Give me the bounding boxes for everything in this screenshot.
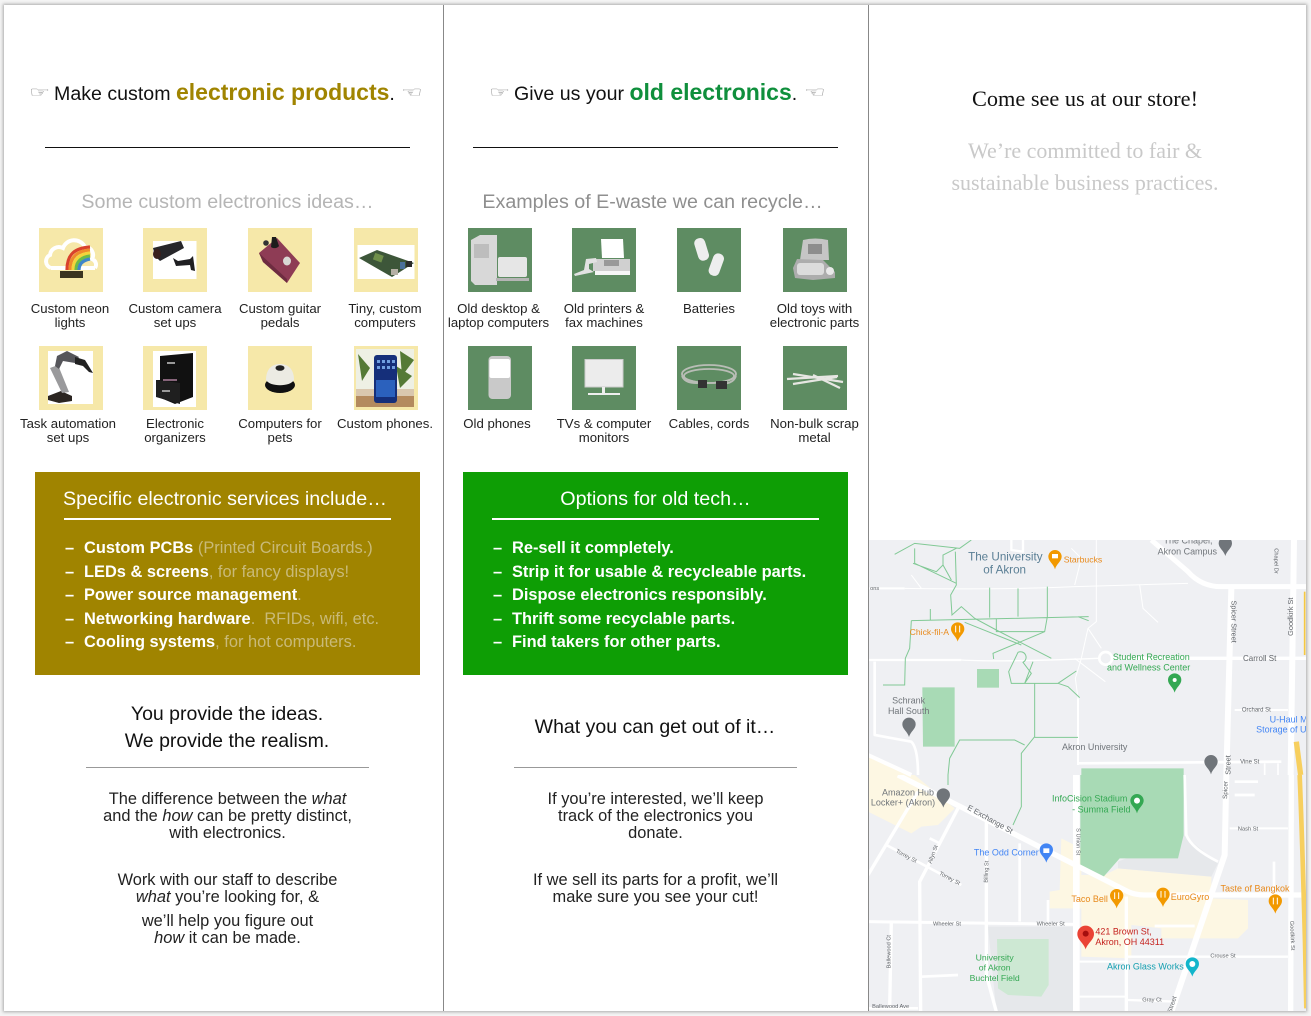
label: tiny custom computers: Tiny, custom xyxy=(348,301,422,316)
label: custom neon lights xyxy=(31,301,109,330)
label: old desktop and laptop computers: Old desktop & xyxy=(457,301,540,316)
text: keep track of the electronics xyxy=(548,790,763,842)
label: custom phones: Custom phones. xyxy=(337,416,433,431)
label: old desktop and laptop computers xyxy=(448,301,549,330)
text: keep track of the electronics: If you’re interested, we’ll keep xyxy=(548,790,763,808)
icon: scrap metal xyxy=(783,346,847,410)
label: old toys with electronic parts xyxy=(770,301,859,330)
label: tiny custom computers xyxy=(348,301,422,330)
text: share of profit xyxy=(533,871,778,906)
options list: Strip it for usable & recycleable parts. xyxy=(512,562,806,580)
label: custom guitar pedals: Custom guitar xyxy=(239,301,321,316)
service list: – xyxy=(65,562,74,580)
icon: batteries xyxy=(677,228,741,292)
label: custom camera set ups: Custom camera xyxy=(128,301,222,316)
heading: give us your old electronics: ☞ xyxy=(489,83,511,100)
options list: – xyxy=(493,610,502,628)
map: store location: Amazon Hub xyxy=(882,788,934,798)
pin: schrank hall xyxy=(902,718,916,737)
map: store location: Vine St xyxy=(1240,760,1260,766)
map: store location: Akron University xyxy=(1062,742,1128,752)
service list: Networking hardware. RFIDs, wifi, etc. xyxy=(84,610,379,628)
label: custom camera set ups: set ups xyxy=(154,315,196,330)
pin: infocision stadium: - Summa Field xyxy=(1072,805,1131,815)
label: old printers and fax machines xyxy=(564,301,644,330)
pin: taste of bangkok xyxy=(1221,883,1290,914)
text: work with our staff xyxy=(118,871,337,947)
pin: student recreation: Student Recreation xyxy=(1113,652,1190,662)
map: store location: ons xyxy=(870,586,879,592)
text: work with our staff: we’ll help you figure out xyxy=(142,912,313,930)
label: electronic organizers: organizers xyxy=(144,430,206,445)
pin: eurogyro: EuroGyro xyxy=(1171,892,1209,902)
map: store location: Chapel Dr xyxy=(1273,548,1279,574)
icon: printer and fax xyxy=(572,228,636,292)
map: store location: Wheeler St xyxy=(933,921,961,927)
map: store location: Torrey St xyxy=(895,849,918,865)
label: old printers and fax machines: Old printers & xyxy=(564,301,644,316)
map: store location: E Exchange St xyxy=(966,803,1015,836)
label: buchtel field: University xyxy=(976,952,1014,962)
pin: taco bell xyxy=(1071,889,1123,908)
icon: custom phone xyxy=(354,346,418,410)
panel: store message xyxy=(952,86,1218,195)
box title: Options for old tech… xyxy=(560,488,751,510)
panel: old electronics heading xyxy=(473,78,838,213)
text: difference between what and how: and the how can be pretty distinct, xyxy=(103,807,352,825)
map: store location: Locker+ (Akron) xyxy=(871,797,935,807)
map: store location: Spicer xyxy=(1222,781,1230,799)
pin: chick-fil-a xyxy=(910,622,964,642)
options list xyxy=(493,539,806,651)
pin: taco bell: Taco Bell xyxy=(1071,894,1108,904)
icon: security camera xyxy=(143,228,207,292)
map: store location: Orchard St xyxy=(1242,707,1271,713)
options list: Dispose electronics responsibly. xyxy=(512,586,767,604)
label: custom guitar pedals xyxy=(239,301,321,330)
map: store location: Schrank xyxy=(892,696,926,706)
map: store location: of Akron xyxy=(983,564,1026,577)
map: store location: Akron Campus xyxy=(1158,546,1218,556)
text: share of profit: If we sell its parts for a profit, we’ll xyxy=(533,871,778,889)
pin: the odd corner xyxy=(974,843,1053,863)
text: share of profit: make sure you see your cut! xyxy=(553,888,758,906)
text: what you can get out of it: What you can get out of it… xyxy=(535,716,775,738)
text: difference between what and how: The difference between the what xyxy=(109,790,346,808)
pin: student recreation: and Wellness Center xyxy=(1107,663,1190,673)
label: non-bulk scrap metal: metal xyxy=(798,430,831,445)
label: tvs and computer monitors xyxy=(557,416,652,445)
label: task automation set ups: set ups xyxy=(47,430,89,445)
label: buchtel field: Buchtel Field xyxy=(970,973,1020,983)
label: old printers and fax machines: fax machines xyxy=(565,315,643,330)
text: you provide the ideas: You provide the ideas. xyxy=(131,703,323,725)
label: custom neon lights: lights xyxy=(55,315,85,330)
options list: Re-sell it completely. xyxy=(512,539,674,557)
label: batteries: Batteries xyxy=(683,301,735,316)
heading: make custom electronic products: ☜ xyxy=(401,83,423,100)
icon: robot arm xyxy=(39,346,103,410)
label: buchtel field xyxy=(970,952,1020,983)
options list: – xyxy=(493,586,502,604)
map: store location: Ballewood Ave xyxy=(872,1004,909,1010)
text: work with our staff: how it can be made. xyxy=(154,929,301,947)
pin: akron glass works xyxy=(1107,957,1199,977)
panel: options for old tech xyxy=(463,472,848,675)
service list: LEDs & screens, for fancy displays! xyxy=(84,562,349,580)
panel: specific electronic services xyxy=(35,472,420,675)
map: store location: Goodkirk St xyxy=(1286,598,1295,636)
label: old toys with electronic parts: electronic parts xyxy=(770,315,859,330)
box title: Specific electronic services include… xyxy=(63,488,387,510)
service list: – xyxy=(65,586,74,604)
heading: give us your old electronics: ☜ xyxy=(804,83,826,100)
label: old phones: Old phones xyxy=(463,416,531,431)
map: store location: Carroll St xyxy=(1243,654,1277,663)
label: non-bulk scrap metal: Non-bulk scrap xyxy=(770,416,859,431)
service list: – xyxy=(65,539,74,557)
icon: pet computer xyxy=(248,346,312,410)
text: committed to fair and sustainable practices xyxy=(869,135,1301,199)
heading: make custom electronic products: ☞ xyxy=(29,83,51,100)
subheading: e-waste examples: Examples of E-waste we can recycle… xyxy=(482,191,823,213)
icon: tiny computer board xyxy=(354,228,418,292)
options list: – xyxy=(493,562,502,580)
pin: chick-fil-a: Chick-fil-A xyxy=(910,627,949,637)
service list: Custom PCBs (Printed Circuit Boards.) xyxy=(84,539,373,557)
label: task automation set ups xyxy=(20,416,116,445)
icon: filing cabinet xyxy=(143,346,207,410)
label: tiny custom computers: computers xyxy=(354,315,416,330)
text: difference between what and how xyxy=(103,790,352,842)
options list: Find takers for other parts. xyxy=(512,633,721,651)
label: custom guitar pedals: pedals xyxy=(261,315,299,330)
options list: – xyxy=(493,539,502,557)
label: custom neon lights: Custom neon xyxy=(31,301,109,316)
panel: custom electronic products xyxy=(29,78,423,213)
map: store location: Storage of U xyxy=(1256,725,1306,735)
pin: the odd corner: The Odd Corner xyxy=(974,848,1039,858)
service list: Power source management. xyxy=(84,586,302,604)
label: old desktop and laptop computers: laptop computers xyxy=(448,315,549,330)
label: tvs and computer monitors: monitors xyxy=(579,430,629,445)
icon: guitar pedal xyxy=(248,228,312,292)
service list: – xyxy=(65,633,74,651)
map: store location: Hall South xyxy=(888,706,929,716)
map: store location: Goodkirk St xyxy=(1288,921,1295,951)
label: cables and cords: Cables, cords xyxy=(669,416,749,431)
text: you provide the ideas: We provide the realism. xyxy=(125,730,329,752)
pin: infocision stadium: InfoCision Stadium xyxy=(1052,794,1127,804)
service list: – xyxy=(65,610,74,628)
map: store location: S Union St xyxy=(1074,828,1080,856)
icon: neon rainbow cloud xyxy=(39,228,103,292)
pin: eurogyro xyxy=(1156,888,1209,907)
label: tvs and computer monitors: TVs & computer xyxy=(557,416,651,431)
heading: give us your old electronics: Give us your old electronics. xyxy=(514,78,797,104)
text: work with our staff: what you’re looking for, & xyxy=(136,888,319,906)
map: store location: Spicer Street xyxy=(1229,600,1238,643)
map: store location: Allyn St xyxy=(928,844,940,865)
label: computers for pets: Computers for xyxy=(238,416,322,431)
icon: monitor xyxy=(572,346,636,410)
icon: cables xyxy=(677,346,741,410)
pin: student recreation xyxy=(1107,652,1190,693)
label: computers for pets xyxy=(238,416,322,445)
subheading: custom electronics ideas: Some custom electronics ideas… xyxy=(81,191,374,213)
text: keep track of the electronics: track of the electronics you xyxy=(558,807,753,825)
label: task automation set ups: Task automation xyxy=(20,416,116,431)
pin: akron glass works: Akron Glass Works xyxy=(1107,961,1184,971)
label: old toys with electronic parts: Old toys with xyxy=(777,301,852,316)
map: store location: Gray Ct xyxy=(1142,997,1162,1003)
heading: make custom electronic products: Make custom electronic products. xyxy=(54,78,395,104)
pin: store address: Akron, OH 44311 xyxy=(1095,937,1164,947)
pin: vine street xyxy=(1204,755,1218,774)
label: electronic organizers xyxy=(144,416,206,445)
service list: Cooling systems, for hot computers. xyxy=(84,633,356,651)
pin: starbucks: Starbucks xyxy=(1064,554,1103,564)
text: work with our staff: Work with our staff to describe xyxy=(118,871,337,889)
map: store location: Crouse St xyxy=(1210,953,1236,959)
text: committed to fair and sustainable practices: We’re committed to fair & xyxy=(968,138,1202,163)
pin: infocision stadium xyxy=(1052,794,1144,815)
service list xyxy=(65,539,379,651)
map: store location: Wheeler St xyxy=(1037,922,1065,928)
heading: come see us at our store: Come see us at our store! xyxy=(972,86,1198,111)
map: store location: Billing St xyxy=(984,860,990,883)
pin: store address: 421 Brown St, xyxy=(1095,926,1152,936)
map: store location: Ballewood Ct xyxy=(886,935,892,968)
icon: desktop and laptop xyxy=(468,228,532,292)
label: buchtel field: of Akron xyxy=(979,962,1011,972)
text: keep track of the electronics: donate. xyxy=(628,824,683,842)
label: custom camera set ups xyxy=(128,301,222,330)
options list: – xyxy=(493,633,502,651)
map: store location: Torrey St xyxy=(938,871,961,887)
text: you provide the ideas xyxy=(124,703,329,752)
options list: Thrift some recyclable parts. xyxy=(512,610,735,628)
pin: chapel xyxy=(1219,537,1232,556)
label: non-bulk scrap metal xyxy=(770,416,859,445)
icon: old phone xyxy=(468,346,532,410)
pin: starbucks xyxy=(1048,550,1103,569)
map: store location: Nash St xyxy=(1238,826,1258,832)
map: store location xyxy=(869,540,1306,1011)
icon: old toy xyxy=(783,228,847,292)
map: store location: Street xyxy=(1224,755,1233,775)
pin: taste of bangkok: Taste of Bangkok xyxy=(1221,883,1290,893)
pin: amazon hub xyxy=(937,788,950,808)
label: electronic organizers: Electronic xyxy=(146,416,204,431)
text: committed to fair and sustainable practices: sustainable business practices. xyxy=(952,170,1218,195)
text: difference between what and how: with electronics. xyxy=(169,824,286,842)
label: computers for pets: pets xyxy=(268,430,292,445)
pin: store address xyxy=(1077,926,1164,949)
map: store location: The University xyxy=(968,551,1043,564)
